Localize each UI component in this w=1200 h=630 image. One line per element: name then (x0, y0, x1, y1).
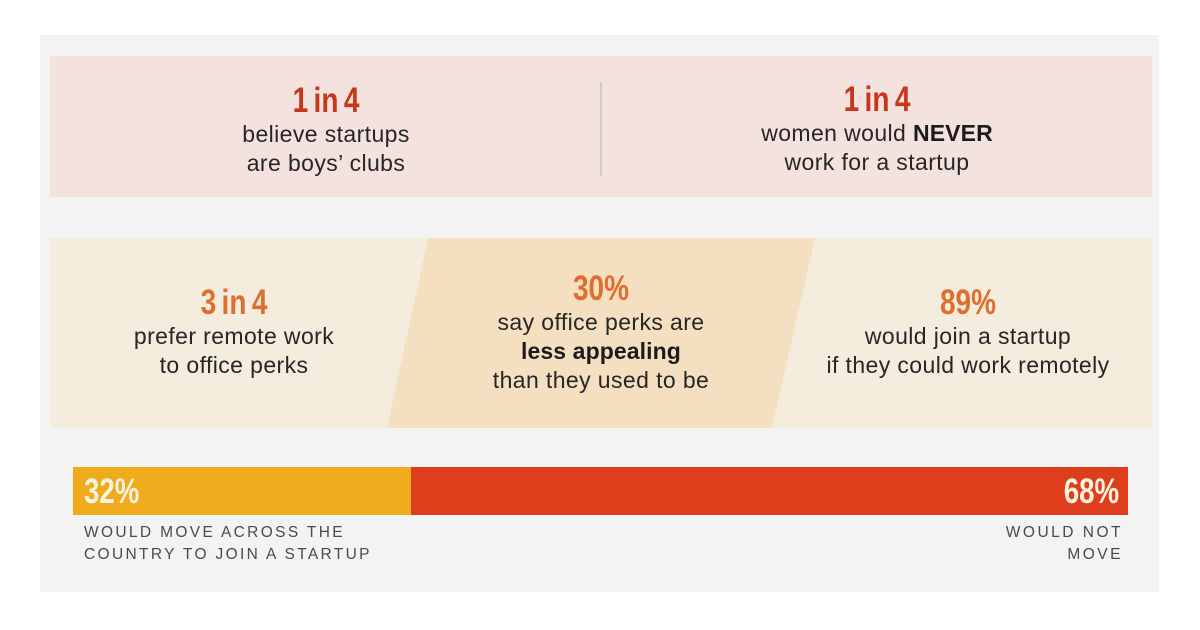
caption: would not move: MOVE (1067, 546, 1123, 563)
description (761, 120, 993, 175)
panel: remote work stats (50, 238, 1152, 428)
number: 1 in 4: 1 in 4 (844, 80, 910, 119)
caption: would move (84, 524, 372, 563)
description: say office perks are (497, 308, 704, 334)
number: 89%: 89% (940, 283, 996, 322)
description: are boys’ clubs (247, 150, 405, 176)
caption: would not move (1006, 524, 1123, 563)
value: 68%: 68% (1064, 472, 1119, 511)
caption: would not move: WOULD NOT (1006, 524, 1123, 541)
value: 32%: 32% (84, 472, 139, 511)
highlighted parallelogram panel (387, 238, 815, 428)
caption: would move: COUNTRY TO JOIN A STARTUP (84, 546, 372, 563)
description: if they could work remotely (826, 352, 1110, 378)
segment: 32% would move (73, 467, 411, 515)
stat: 1 in 4 women would never work for a startup (761, 80, 993, 175)
stacked bar chart: relocation (73, 467, 1128, 515)
number: 30%: 30% (573, 269, 629, 308)
stat: 30% say office perks are less appealing (493, 269, 709, 393)
description (134, 323, 334, 378)
description: women would NEVER (761, 120, 993, 146)
description: to office perks (160, 352, 308, 378)
panel: startup culture stats (50, 56, 1152, 197)
description: than they used to be (493, 366, 709, 392)
description: prefer remote work (134, 323, 334, 349)
description: work for a startup (785, 149, 969, 175)
description (826, 323, 1110, 378)
caption: would move: WOULD MOVE ACROSS THE (84, 524, 345, 541)
number: 1 in 4: 1 in 4 (293, 81, 359, 120)
stat: 89% would join a startup if remote (826, 283, 1110, 378)
description: would join a startup (865, 323, 1071, 349)
stat: 1 in 4 believe startups are boys' clubs (242, 81, 410, 176)
description (493, 308, 709, 393)
description: less appealing (521, 338, 681, 364)
description (242, 121, 410, 176)
stat: 3 in 4 prefer remote work (134, 283, 334, 378)
number: 3 in 4: 3 in 4 (201, 283, 267, 322)
description: believe startups (242, 121, 410, 147)
